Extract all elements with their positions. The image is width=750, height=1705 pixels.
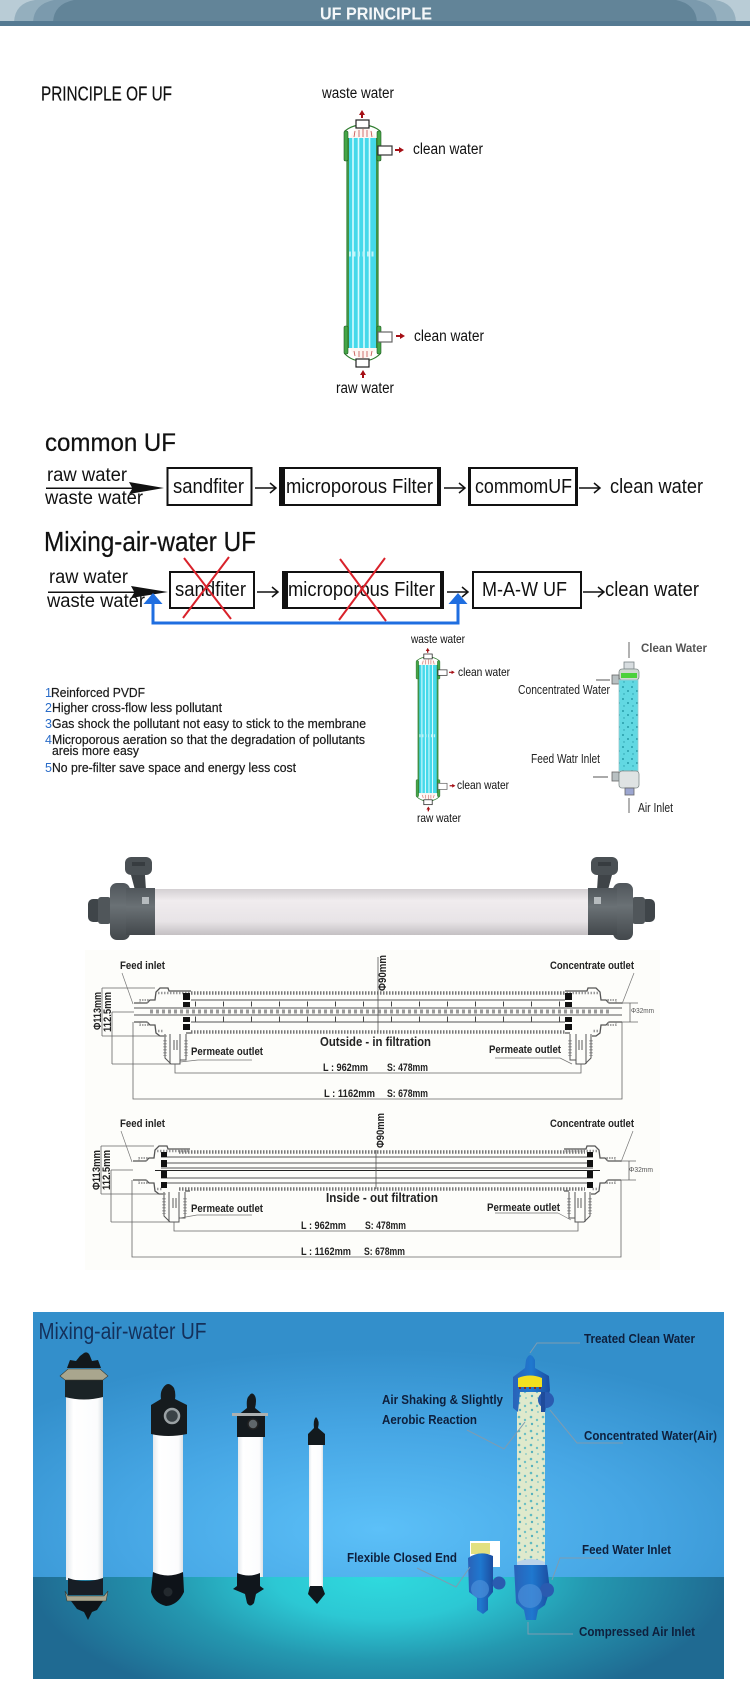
- item 2: 2: [45, 701, 52, 715]
- label: clean water: Clean Water: [641, 641, 707, 655]
- heading: mixing-air-water UF: Mixing-air-water UF: [44, 526, 256, 557]
- product: mid-size membrane: [232, 1394, 268, 1606]
- item 1: Reinforced PVDF: [51, 686, 145, 700]
- labels: S: 478mm: [387, 1062, 428, 1074]
- labels: Φ32mm: [631, 1008, 654, 1015]
- labels: L : 1162mm: [324, 1088, 375, 1100]
- arrow: [255, 483, 276, 493]
- labels: Φ32mm: [629, 1167, 653, 1174]
- labels: L : 962mm: [323, 1062, 368, 1074]
- cross-section: [101, 1131, 636, 1257]
- inputs: waste water: [46, 591, 146, 612]
- item 5: No pre-filter save space and energy less cost: [52, 761, 297, 775]
- labels: Concentrate outlet: [550, 960, 634, 972]
- drawing: outside-in filtration: [92, 955, 654, 1100]
- labels: Concentrate outlet: [550, 1118, 634, 1130]
- label: clean water bottom: clean water: [457, 778, 509, 792]
- label: raw water: raw water: [417, 811, 461, 825]
- red cross: microporous removed: [339, 558, 386, 621]
- labels: Φ113mm: [92, 992, 104, 1030]
- flow chart: mixing-air-water UF: [46, 557, 699, 623]
- label: waste water: waste water: [321, 85, 394, 102]
- box: microporous filter: [279, 467, 441, 506]
- inputs: waste water: [44, 488, 144, 509]
- label: air inlet: Air Inlet: [638, 800, 673, 815]
- label: clean water top: clean water: [413, 141, 483, 158]
- diagram: small UF membrane: [410, 632, 510, 825]
- panel: mixing-air-water UF products: [33, 1312, 724, 1679]
- item 4: [45, 733, 365, 758]
- box: microporous filter: microporous Filter: [288, 579, 435, 601]
- product: large membrane: [60, 1352, 108, 1620]
- product photo: UF tube: [88, 857, 655, 940]
- flow chart: common UF: [44, 465, 703, 509]
- label: waste water: waste water: [410, 632, 465, 646]
- red cross: sandfiter removed: [183, 557, 231, 619]
- callout labels: Air Shaking & Slightly: [382, 1393, 503, 1407]
- blue bypass arrow: [144, 593, 468, 623]
- labels: Φ113mm: [91, 1150, 103, 1190]
- item 3: 3: [45, 717, 52, 731]
- labels: [92, 955, 654, 1100]
- callout labels: [347, 1332, 717, 1639]
- labels: Φ90mm: [375, 1113, 387, 1148]
- labels: Feed inlet: [120, 1118, 165, 1130]
- labels: [91, 1113, 653, 1258]
- label: concentrated water: Concentrated Water: [518, 682, 611, 697]
- box: commomUF: commomUF: [475, 476, 572, 498]
- heading: principle of UF: PRINCIPLE OF UF: [41, 84, 172, 106]
- labels: 112.5mm: [101, 1150, 113, 1190]
- label: clean water top: clean water: [458, 665, 510, 679]
- labels: S: 678mm: [364, 1246, 405, 1258]
- label: clean water bottom: clean water: [414, 328, 484, 345]
- membrane tube: [344, 110, 405, 378]
- item 5: 5: [45, 761, 52, 775]
- labels: Permeate outlet: [191, 1203, 263, 1215]
- label: raw water: raw water: [336, 380, 394, 397]
- leader lines: [417, 1343, 623, 1634]
- box: sandfiter: [168, 468, 252, 505]
- box: sandfiter: sandfiter: [175, 579, 246, 601]
- box: commomUF: [468, 467, 578, 506]
- drawing: inside-out filtration: [91, 1113, 653, 1258]
- flexible closed end part: [468, 1541, 506, 1614]
- diagram: UF membrane principle: [321, 85, 484, 397]
- labels: 112.5mm: [102, 992, 114, 1032]
- callout labels: Aerobic Reaction: [382, 1413, 477, 1427]
- arrow: [583, 587, 604, 597]
- arrow: [447, 587, 468, 597]
- labels: Permeate outlet: [487, 1202, 560, 1214]
- callout labels: Concentrated Water(Air): [584, 1429, 717, 1443]
- inputs: raw water: [47, 465, 128, 486]
- panel: technical drawings: [85, 950, 660, 1270]
- cross-section: [102, 957, 638, 1099]
- item 3: Gas shock the pollutant not easy to stick to the membrane: [52, 717, 366, 731]
- inputs: [44, 465, 164, 509]
- label: feed water inlet: Feed Watr Inlet: [531, 751, 600, 766]
- arrow: [579, 483, 600, 493]
- box: M-A-W UF: [473, 572, 581, 608]
- item 4: areis more easy: [52, 744, 140, 758]
- labels: Feed inlet: [120, 960, 165, 972]
- panel title: Mixing-air-water UF: [38, 1318, 206, 1344]
- module body: [612, 662, 639, 795]
- labels: Permeate outlet: [191, 1046, 263, 1058]
- small tube: [416, 648, 455, 811]
- labels: Outside - in filtration: [320, 1034, 431, 1049]
- item 2: Higher cross-flow less pollutant: [52, 701, 223, 715]
- item 4: Microporous aeration so that the degradation of pollutants: [52, 733, 365, 747]
- labels: Permeate outlet: [489, 1044, 561, 1056]
- header banner: [0, 0, 750, 26]
- arrow: [257, 587, 278, 597]
- product: medium membrane: [151, 1384, 187, 1606]
- labels: L : 1162mm: [301, 1246, 351, 1258]
- diagram: mixing-air-water module: [518, 641, 707, 815]
- heading: common UF: common UF: [45, 429, 176, 457]
- feature list: [45, 686, 366, 775]
- labels: Φ90mm: [377, 955, 389, 991]
- item 1: 1: [45, 686, 52, 700]
- box: microporous filter: microporous Filter: [286, 476, 433, 498]
- box: sandfiter: sandfiter: [173, 476, 244, 498]
- labels: S: 478mm: [365, 1220, 406, 1232]
- output: clean water: clean water: [605, 579, 699, 601]
- callout labels: Compressed Air Inlet: [579, 1625, 696, 1639]
- callout labels: Treated Clean Water: [584, 1332, 695, 1346]
- labels: Inside - out filtration: [326, 1190, 438, 1205]
- callout labels: Feed Water Inlet: [582, 1543, 672, 1557]
- inputs: [46, 567, 168, 612]
- output: clean water: clean water: [610, 476, 703, 498]
- callout labels: Flexible Closed End: [347, 1551, 457, 1565]
- arrow: [444, 483, 465, 493]
- labels: L : 962mm: [301, 1220, 346, 1232]
- product: small membrane: [308, 1417, 325, 1604]
- labels: S: 678mm: [387, 1088, 428, 1100]
- item 4: 4: [45, 733, 52, 747]
- title: UF PRINCIPLE: [320, 4, 432, 24]
- inputs: raw water: [49, 567, 129, 588]
- arrows: [593, 642, 629, 813]
- box: sandfiter: [170, 572, 254, 608]
- box: microporous filter: [282, 571, 444, 609]
- box: M-A-W UF: M-A-W UF: [482, 579, 567, 601]
- module cutaway: [513, 1355, 554, 1620]
